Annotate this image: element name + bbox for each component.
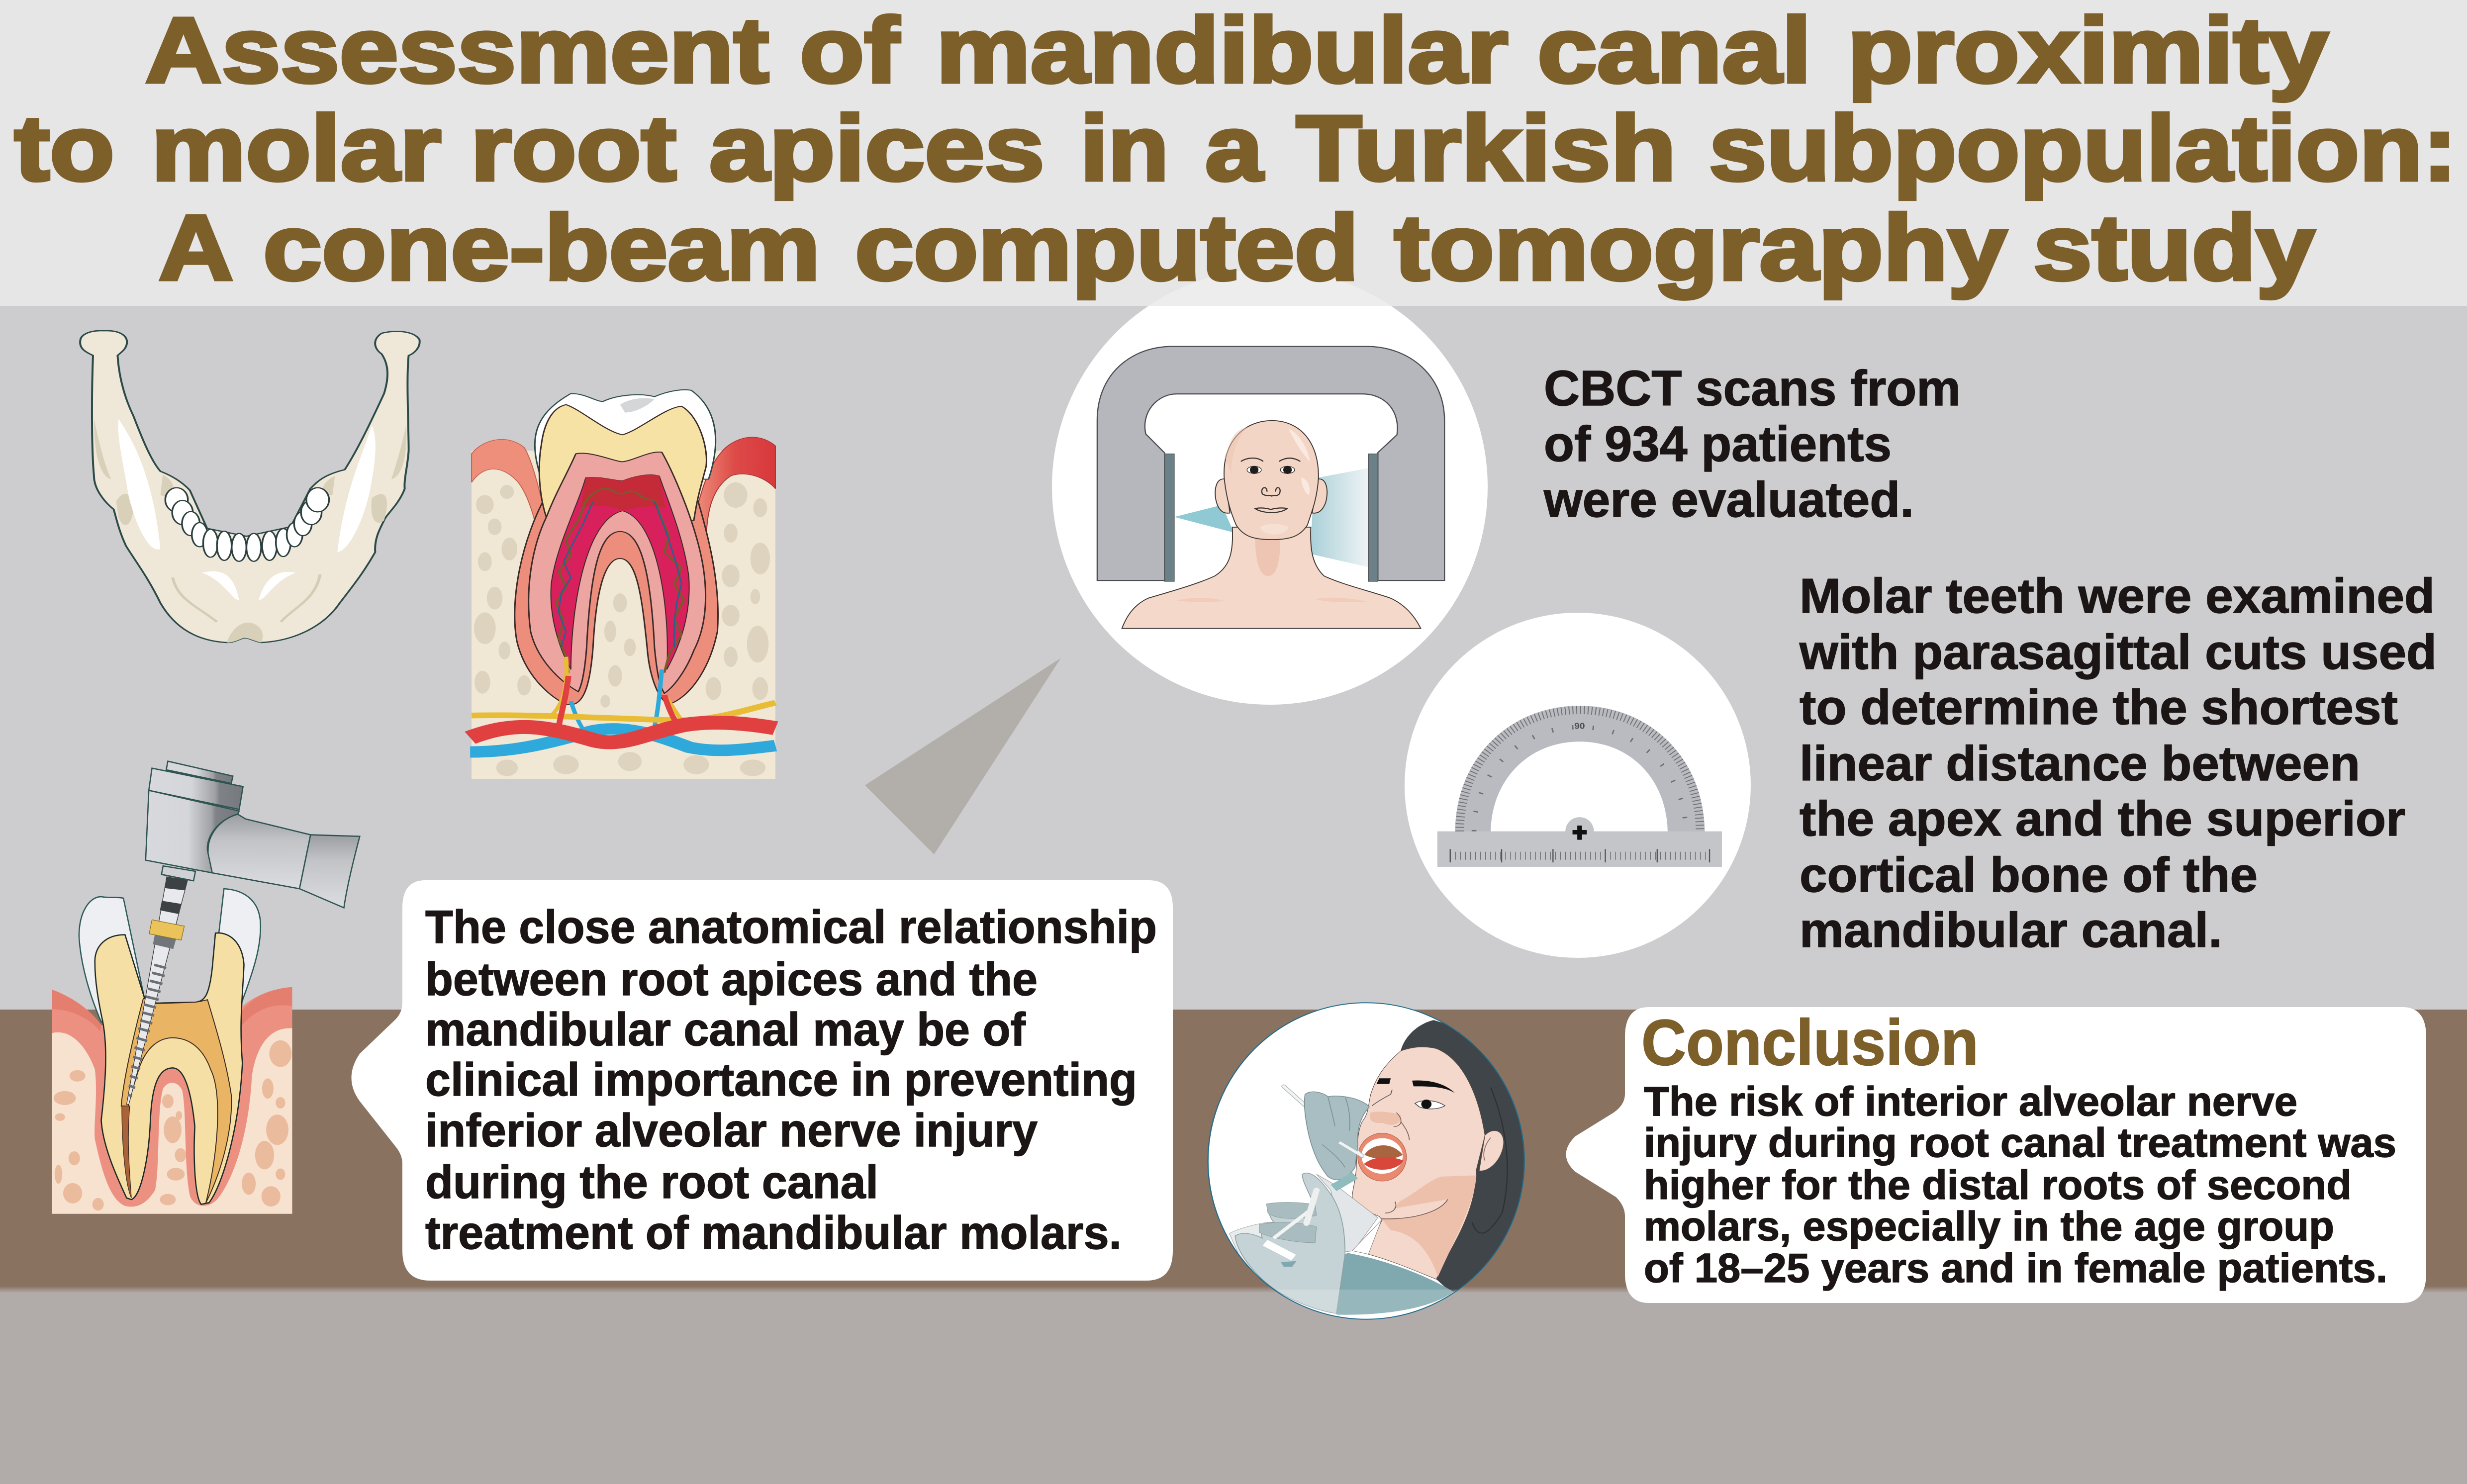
lower gloved hand: [1235, 1173, 1345, 1313]
title band: [0, 0, 2467, 306]
pointer triangle: [865, 658, 1061, 854]
syringe lower: [1274, 1208, 1312, 1238]
mandible teeth: [165, 488, 329, 561]
text: molar teeth method: with parasagittal cuts used: [1799, 625, 2437, 679]
bone spots: [54, 1040, 291, 1210]
callout: clinical importance: [351, 880, 1173, 1281]
title: proximity: [1847, 0, 2328, 102]
title: Assessment: [145, 0, 769, 102]
text: molar teeth method: Molar teeth were examined: [1800, 568, 2435, 623]
face features: [1241, 458, 1300, 513]
upper gloved hand: [1305, 1092, 1369, 1180]
head: [1224, 421, 1319, 540]
callout: conclusion: [1566, 1006, 2426, 1303]
mouth: [1358, 1133, 1407, 1181]
gown: [1336, 1253, 1453, 1315]
title: of: [800, 0, 900, 102]
text: molar teeth method: mandibular canal.: [1800, 903, 2222, 957]
face and neck: [1352, 1047, 1485, 1279]
ear: [1479, 1131, 1504, 1171]
enamel: [535, 390, 716, 479]
conclusion body: injury during root canal treatment was: [1644, 1119, 2396, 1166]
callout: clinical importance: during the root canal: [425, 1156, 878, 1208]
handpiece: [146, 761, 360, 908]
title: subpopulation:: [1709, 97, 2457, 200]
enamel: [79, 897, 144, 1022]
protractor scales: [1450, 710, 1709, 862]
title: apices: [709, 97, 1044, 200]
title: A: [159, 196, 233, 299]
icon: patient in CBCT scanner: [1097, 347, 1444, 629]
title: [14, 0, 2457, 299]
dentin root layer: [529, 452, 706, 693]
sleeve: [1317, 1174, 1378, 1252]
text: molar teeth method: cortical bone of the: [1800, 847, 2258, 902]
title: tomography: [1394, 196, 2007, 299]
eye: [1415, 1101, 1445, 1109]
conclusion heading: Conclusion: [1641, 1006, 1979, 1079]
icon: dental patient receiving injection: [1194, 1003, 1536, 1321]
gum: [52, 987, 292, 1206]
title: mandibular: [936, 0, 1508, 102]
text: CBCT scans: were evaluated.: [1543, 472, 1914, 528]
callout: clinical importance: treatment of mandibular molars.: [425, 1206, 1122, 1259]
conclusion body: The risk of interior alveolar nerve: [1644, 1078, 2297, 1124]
pulp chamber: [121, 998, 231, 1203]
conclusion body: of 18–25 years and in female patients.: [1644, 1245, 2387, 1291]
conclusion body: [1644, 1078, 2396, 1291]
text: CBCT scans: CBCT scans from: [1544, 361, 1961, 416]
callout: clinical importance: clinical importance in preventing: [425, 1053, 1137, 1106]
gums: [472, 440, 547, 540]
hair: [1401, 1020, 1525, 1292]
obturation: [122, 1106, 131, 1198]
nose: [1370, 1112, 1401, 1125]
bone spots: [474, 482, 770, 776]
text: molar teeth method: linear distance between: [1800, 736, 2360, 791]
lower fade: [1194, 1290, 1536, 1321]
pulp nerve plexus: [556, 489, 684, 673]
vessels and nerve: [470, 657, 775, 752]
title: in: [1080, 97, 1169, 200]
text: CBCT scans: of 934 patients: [1544, 416, 1892, 472]
circle: CBCT scanner background: [1044, 264, 1492, 705]
pulp: [551, 475, 689, 669]
circle: protractor background: [1405, 613, 1751, 958]
file shaft: [127, 876, 188, 1105]
title: a: [1205, 97, 1264, 200]
title: computed: [855, 196, 1359, 299]
alveolar bone block: [52, 1025, 292, 1214]
title: canal: [1537, 0, 1811, 102]
dentin: [539, 405, 706, 520]
title: study: [2033, 196, 2315, 299]
text: molar teeth method: [1799, 568, 2437, 957]
neck shadow: [1381, 1175, 1476, 1277]
icon: protractor: [1437, 706, 1722, 867]
title: to: [14, 97, 114, 200]
beams: [1174, 505, 1234, 533]
syringe upper: [1284, 1086, 1362, 1156]
background: lower grey: [0, 1286, 2467, 1484]
background: brown band: [0, 1010, 2467, 1290]
root outer layer: [515, 495, 718, 704]
callout: clinical importance: The close anatomical relationship: [425, 901, 1157, 953]
icon: mandible: [80, 331, 420, 643]
title: cone-beam: [263, 196, 820, 299]
icon: tooth anatomy cross-section: [470, 390, 775, 779]
callout: clinical importance: inferior alveolar nerve injury: [425, 1104, 1038, 1156]
icon: protractor: 90: [1574, 721, 1585, 731]
icon: tooth with rotary endodontic file: [52, 761, 360, 1214]
ears: [1215, 479, 1327, 513]
brows: [1376, 1078, 1455, 1093]
title: root: [471, 97, 676, 200]
background: upper grey: [0, 298, 2467, 1015]
scanner arch: [1097, 347, 1444, 580]
text: CBCT scans: [1543, 361, 1961, 528]
callout: clinical importance: between root apices and the: [425, 953, 1038, 1005]
dentin: [95, 933, 244, 1205]
conclusion body: molars, especially in the age group: [1644, 1203, 2334, 1249]
callout: clinical importance: mandibular canal may be of: [425, 1003, 1026, 1055]
title: molar: [151, 97, 441, 200]
title: Turkish: [1296, 97, 1676, 200]
shoulders and neck: [1122, 527, 1421, 629]
conclusion body: higher for the distal roots of second: [1644, 1162, 2352, 1208]
text: molar teeth method: the apex and the superior: [1800, 791, 2405, 846]
text: molar teeth method: to determine the shortest: [1800, 680, 2398, 735]
